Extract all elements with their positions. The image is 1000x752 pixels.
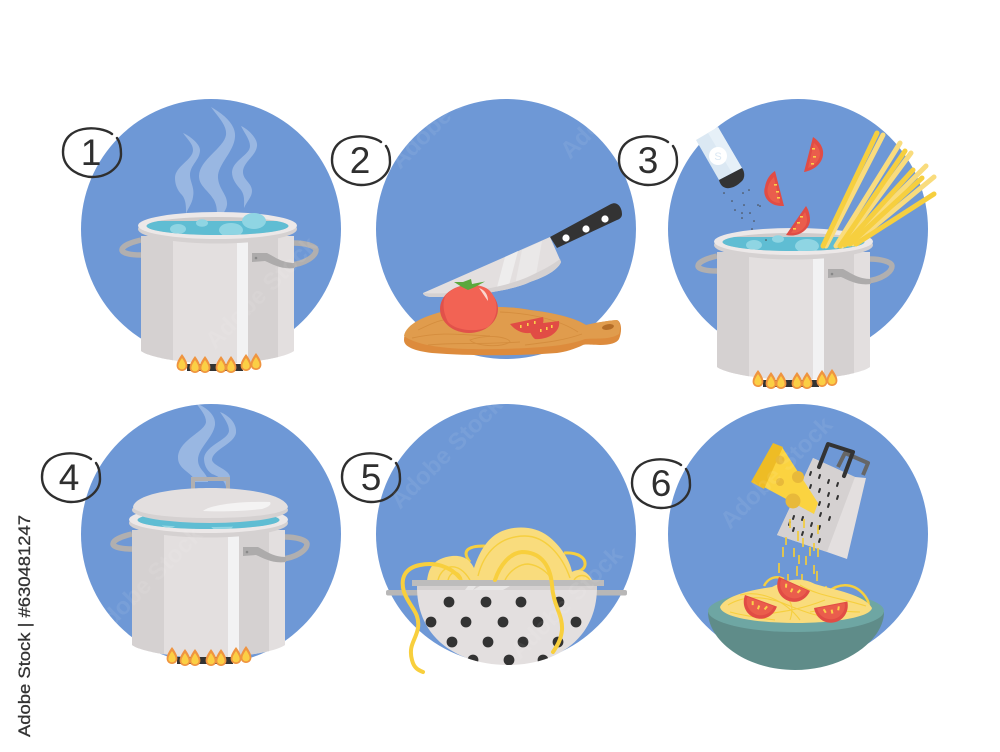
colander [386, 580, 627, 665]
pasta loops behind [466, 546, 585, 574]
grater [777, 444, 868, 559]
circle background 5 [376, 404, 636, 664]
panel: step 1 boil water [63, 99, 341, 373]
falling salt grains [723, 189, 767, 241]
steam 4 [178, 403, 236, 487]
burner flames 4 [167, 646, 251, 666]
step number 6 [632, 459, 690, 508]
panel: step 4 cover and simmer [42, 403, 341, 666]
step number 6: 6 [651, 463, 671, 504]
watermark text: Adobe Stock [715, 411, 838, 534]
circle background 4 [81, 404, 341, 664]
watermark text: Adobe Stock [385, 391, 508, 514]
salt shaker [696, 127, 744, 188]
knife [423, 203, 622, 297]
watermark text: Adobe Stock [385, 51, 508, 174]
step number 2: 2 [350, 140, 370, 181]
watermark text [85, 41, 838, 664]
panel: step 6 serve with cheese [632, 404, 928, 670]
step number 1 [63, 128, 121, 177]
burner flames 3 [753, 369, 837, 389]
pasta bowl [708, 577, 884, 670]
tomato [440, 279, 498, 333]
step number 5 [342, 453, 400, 502]
panel: step 5 drain in colander [342, 404, 636, 672]
grated cheese falling [779, 519, 826, 594]
vertical stock id text: Adobe Stock | #630481247 [15, 515, 34, 737]
step number 2 [332, 136, 390, 185]
pasta mound [427, 527, 593, 582]
step number 1: 1 [81, 132, 101, 173]
pot with water 3 [698, 228, 892, 387]
cheese wedge [751, 443, 818, 514]
circle background 1 [81, 99, 341, 359]
tomato slices on board [510, 317, 559, 339]
pot lid [132, 479, 288, 523]
burner flames 1 [177, 353, 261, 373]
cutting board [404, 307, 621, 355]
watermark text: Adobe Stock [200, 231, 323, 354]
watermark text: Adobe Stock [505, 541, 628, 664]
spaghetti bundle [823, 133, 934, 246]
step number 5: 5 [361, 457, 381, 498]
pot with water 4 [113, 506, 307, 665]
panel: step 3 add salt, tomato, spaghetti [619, 99, 934, 389]
steam 1 [175, 107, 257, 224]
pot with boiling water [122, 212, 316, 371]
watermark text: Adobe Stock [85, 521, 208, 644]
falling tomato slices [764, 137, 823, 236]
watermark text: Adobe Stock [555, 41, 678, 164]
water band 4 [138, 513, 278, 527]
step number 3: 3 [638, 140, 658, 181]
salt shaker: S [714, 151, 722, 163]
step number 4 [42, 453, 100, 502]
panel: step 2 chop tomato [332, 99, 636, 359]
circle background 2 [376, 99, 636, 359]
step number 4: 4 [59, 457, 79, 498]
circle background 6 [668, 404, 928, 664]
tomato slices on pasta [739, 577, 851, 626]
step number 3 [619, 136, 677, 185]
circle background 3 [668, 99, 928, 359]
hanging pasta strands [403, 552, 562, 672]
